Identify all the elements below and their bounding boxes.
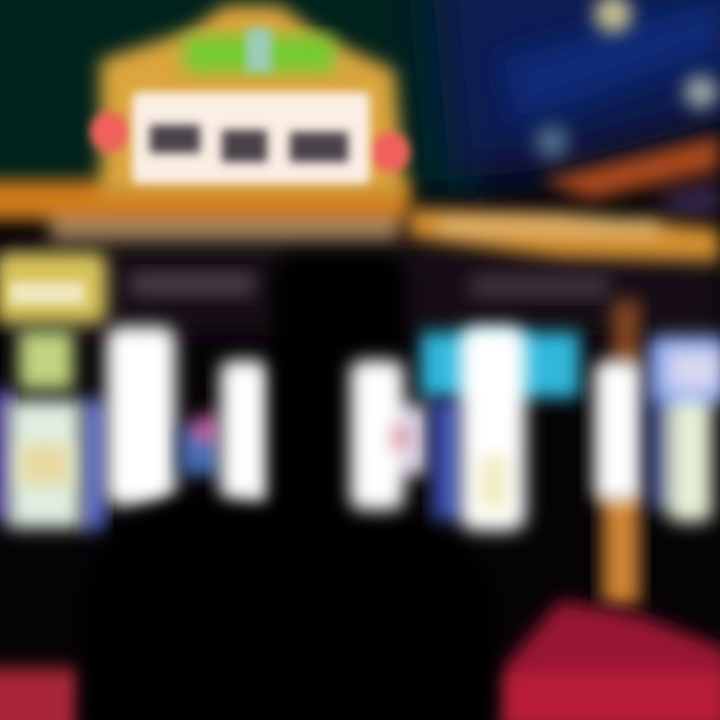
slot blue side xyxy=(432,400,464,520)
slot screen column 2 xyxy=(220,360,268,512)
marquee sign xyxy=(90,5,410,195)
ceiling lights xyxy=(535,0,718,159)
marquee green panel xyxy=(184,36,334,72)
foreground silhouette xyxy=(80,255,495,720)
marquee blue centre xyxy=(246,28,272,72)
orange band: right xyxy=(408,208,720,262)
dim signs under the band xyxy=(130,272,610,298)
left slot machine xyxy=(0,252,107,530)
slot screen column 5 xyxy=(594,360,642,502)
slot screen column 4 xyxy=(460,326,526,531)
slot colour accent xyxy=(180,415,220,475)
marquee pink bulbs xyxy=(90,112,410,172)
slot screen column 1 xyxy=(106,326,176,506)
red carpet: left xyxy=(0,668,80,720)
red carpet: right xyxy=(500,600,720,720)
slot screen column 3 xyxy=(350,360,428,510)
marquee frame xyxy=(100,5,405,195)
cyan slot topper xyxy=(420,332,580,398)
right upper orange awning xyxy=(540,135,720,215)
orange band: left xyxy=(0,180,410,242)
right slot machine xyxy=(648,335,720,522)
orange pillar xyxy=(602,300,640,605)
marquee dark lettering xyxy=(150,125,348,162)
marquee white board xyxy=(132,92,370,184)
